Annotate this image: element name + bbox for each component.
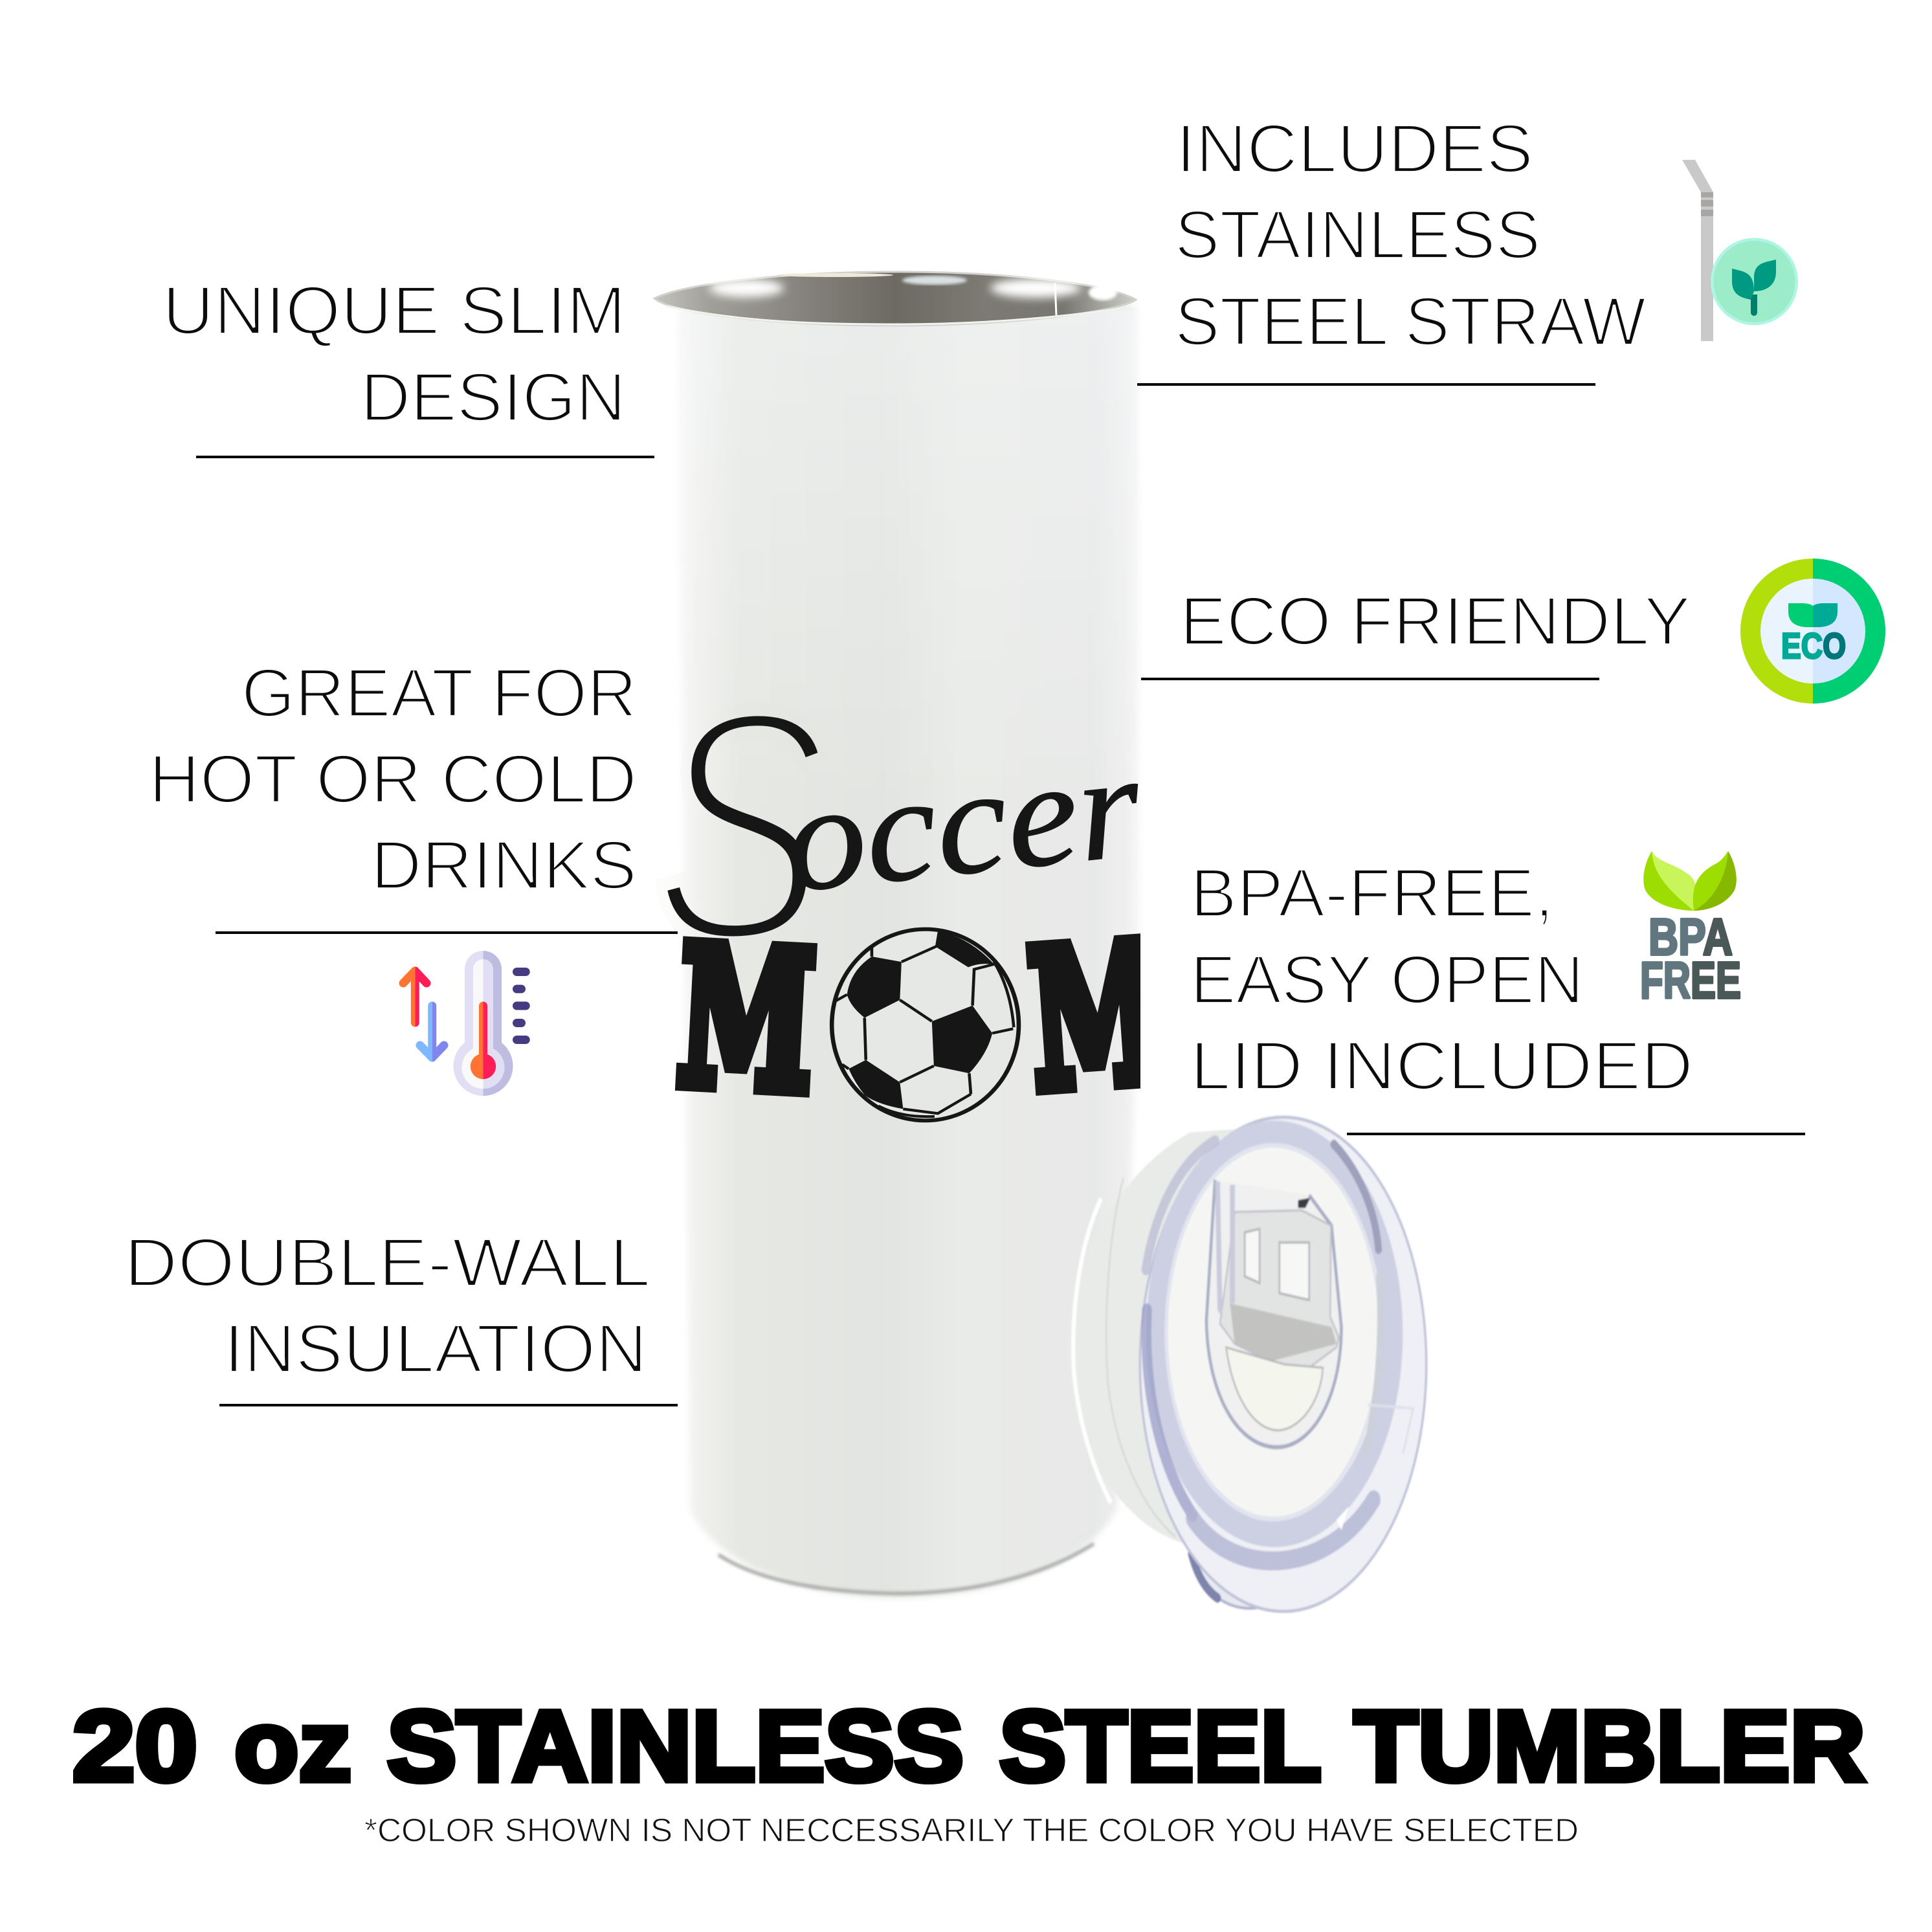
tumbler metal rim xyxy=(654,272,1136,326)
icon: eco badge xyxy=(1740,559,1885,704)
label: UNIQUE SLIM xyxy=(162,272,626,349)
soccer ball xyxy=(832,929,1019,1120)
tumbler base edge shadow xyxy=(718,1544,1094,1593)
straw xyxy=(1682,160,1713,341)
title: TUMBLER xyxy=(1354,1690,1865,1802)
label: INSULATION xyxy=(224,1311,647,1387)
block letter M left: M xyxy=(673,905,819,1134)
label: EASY OPEN xyxy=(1190,942,1584,1018)
label: STEEL STRAW xyxy=(1175,283,1646,360)
callout: double-wall insulation xyxy=(124,1225,678,1406)
label: ECO FRIENDLY xyxy=(1180,583,1691,660)
printed artwork: Soccer MOM xyxy=(654,641,1173,1134)
label: HOT OR COLD xyxy=(149,741,637,817)
title: oz xyxy=(234,1690,351,1802)
callout: bpa-free easy open lid xyxy=(1190,855,1805,1135)
lid pull tab xyxy=(1188,1544,1280,1608)
label: DRINKS xyxy=(371,827,637,904)
lid sipping slot xyxy=(1206,1180,1341,1447)
printed artwork: Soccer MOM: occer xyxy=(777,722,1148,924)
title: STAINLESS xyxy=(387,1690,964,1802)
sprout badge xyxy=(1711,238,1798,325)
icon: thermometer with hot and cold arrows xyxy=(403,951,530,1096)
clear tumbler lid xyxy=(1067,1117,1427,1612)
icon: metal straw with sprout badge xyxy=(1682,160,1798,341)
footnote: *COLOR SHOWN IS NOT NECCESSARILY THE COLOR YOU HAVE SELECTED xyxy=(364,1812,1579,1849)
label: INCLUDES xyxy=(1176,111,1533,187)
script word: Soccer: S xyxy=(654,641,827,1010)
title: STEEL xyxy=(999,1690,1320,1802)
block letter M right: M xyxy=(1023,901,1173,1132)
tumbler product photo xyxy=(654,272,1173,1597)
label: STAINLESS xyxy=(1175,197,1540,273)
title: 20 xyxy=(72,1690,197,1802)
lid slider block xyxy=(1220,1210,1339,1368)
lid front ring xyxy=(1140,1117,1427,1612)
bpa free wordmark: BPA xyxy=(1649,908,1740,966)
tumbler upper sheen xyxy=(680,311,1135,809)
eco badge wordmark: ECO xyxy=(1781,625,1846,666)
label: BPA-FREE, xyxy=(1190,855,1554,931)
callout: unique slim design xyxy=(162,272,654,458)
label: LID INCLUDED xyxy=(1190,1028,1693,1104)
callout: great for hot or cold drinks xyxy=(149,655,678,934)
callout: eco friendly xyxy=(1141,583,1691,680)
callout: includes stainless steel straw xyxy=(1137,111,1646,386)
bpa free wordmark: FREE xyxy=(1640,951,1760,1009)
icon: bpa free leaves xyxy=(1640,851,1741,1009)
label: DOUBLE-WALL xyxy=(124,1225,650,1301)
label: GREAT FOR xyxy=(241,655,637,731)
label: DESIGN xyxy=(361,359,626,436)
lid back skirt xyxy=(1067,1127,1260,1557)
tumbler body xyxy=(677,304,1140,1597)
